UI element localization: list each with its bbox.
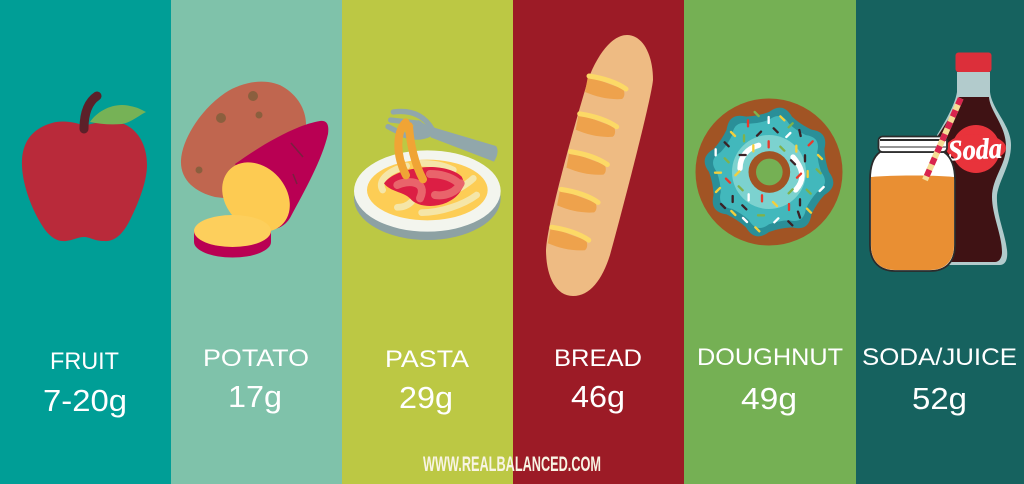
label: bread: BREAD — [554, 345, 642, 372]
label: doughnut: DOUGHNUT — [697, 344, 843, 371]
value: fruit: 7-20g — [43, 384, 127, 418]
icon: soda bottle: Soda — [947, 133, 1003, 167]
panel: potato — [171, 0, 342, 484]
label: potato: POTATO — [203, 345, 309, 372]
icon: potato and sweet potato — [181, 82, 328, 257]
icon: pasta plate and fork — [354, 111, 501, 240]
value: pasta: 29g — [399, 381, 453, 415]
label: soda/juice: SODA/JUICE — [862, 344, 1017, 371]
value: doughnut: 49g — [741, 382, 797, 416]
value: potato: 17g — [228, 380, 282, 414]
value: bread: 46g — [571, 380, 625, 414]
icon: juice jar — [870, 98, 961, 271]
value: soda/juice: 52g — [912, 382, 967, 416]
panel: soda and juice — [856, 0, 1024, 484]
panel: fruit — [0, 0, 171, 484]
icon: doughnut — [696, 98, 842, 246]
website url: WWW.REALBALANCED.COM — [423, 453, 601, 476]
label: pasta: PASTA — [385, 346, 469, 373]
icon: soda bottle — [930, 52, 1011, 265]
icon: baguette — [546, 35, 653, 296]
panel: bread — [513, 0, 684, 484]
icon: apple — [22, 96, 147, 241]
panel: doughnut — [684, 0, 856, 484]
label: fruit: FRUIT — [50, 348, 119, 375]
panel: pasta — [342, 0, 513, 484]
